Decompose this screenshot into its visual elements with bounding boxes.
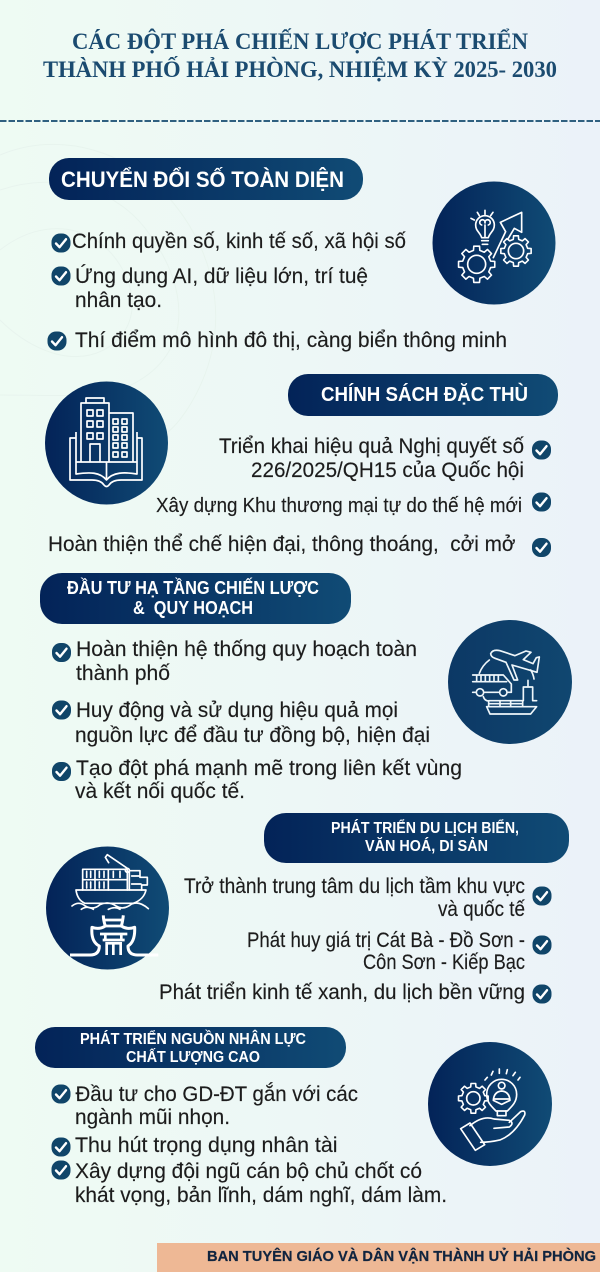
- heading pill: du lịch biển: [264, 813, 569, 863]
- bullet list: nguồn nhân lực: khát vọng, bản lĩnh, dám nghĩ, dám làm.: [75, 1183, 447, 1207]
- bullet list: nguồn nhân lực: Thu hút trọng dụng nhân tài: [75, 1133, 338, 1157]
- bullet list: du lịch biển: Trở thành trung tâm du lịch tầm khu vực: [184, 874, 525, 898]
- icon: hand holding gear and lightbulb: [428, 1042, 552, 1166]
- bullet list: đầu tư hạ tầng: [52, 637, 462, 803]
- icon: plane, bus and ship: [448, 620, 572, 744]
- heading pill: đầu tư hạ tầng: [40, 573, 351, 624]
- heading pill: chuyển đổi số: [49, 158, 363, 200]
- bullet list: nguồn nhân lực: ngành mũi nhọn.: [75, 1105, 230, 1129]
- title: [43, 28, 557, 83]
- bullet list: chính sách đặc thù: [48, 434, 551, 557]
- bullet list: chuyển đổi số: Thí điểm mô hình đô thị, càng biển thông minh: [75, 328, 507, 352]
- icon: buildings on open book: [45, 382, 168, 504]
- heading pill: nguồn nhân lực: PHÁT TRIỂN NGUỒN NHÂN LỰC: [80, 1030, 306, 1048]
- background contour lines: [0, 144, 216, 437]
- bullet list: chuyển đổi số: nhân tạo.: [75, 288, 162, 312]
- heading pill: chính sách đặc thù: [288, 374, 558, 416]
- heading pill: đầu tư hạ tầng: & QUY HOẠCH: [133, 598, 253, 618]
- bullet list: nguồn nhân lực: [52, 1081, 447, 1207]
- bullet list: nguồn nhân lực: Xây dựng đội ngũ cán bộ chủ chốt có: [75, 1159, 422, 1183]
- bullet list: đầu tư hạ tầng: nguồn lực để đầu tư đồng bộ, hiện đại: [75, 723, 430, 747]
- bullet list: du lịch biển: [159, 874, 552, 1004]
- bullet list: đầu tư hạ tầng: Tạo đột phá mạnh mẽ trong liên kết vùng: [76, 756, 462, 780]
- bullet list: đầu tư hạ tầng: Huy động và sử dụng hiệu quả mọi: [76, 698, 398, 722]
- bullet list: đầu tư hạ tầng: và kết nối quốc tế.: [75, 779, 245, 803]
- bullet list: chuyển đổi số: [48, 229, 507, 352]
- heading pill: du lịch biển: VĂN HOÁ, DI SẢN: [365, 838, 488, 855]
- bullet list: du lịch biển: Phát triển kinh tế xanh, du lịch bền vững: [159, 980, 525, 1004]
- heading pill: nguồn nhân lực: CHẤT LƯỢNG CAO: [126, 1049, 260, 1066]
- bullet list: chính sách đặc thù: 226/2025/QH15 của Quốc hội: [251, 458, 524, 482]
- title: CÁC ĐỘT PHÁ CHIẾN LƯỢC PHÁT TRIỂN: [72, 28, 528, 55]
- heading pill: chính sách đặc thù: CHÍNH SÁCH ĐẶC THÙ: [321, 382, 528, 406]
- bullet list: du lịch biển: và quốc tế: [438, 897, 525, 921]
- bullet list: đầu tư hạ tầng: thành phố: [76, 661, 170, 685]
- panel: chính sách đặc thù: [45, 374, 558, 557]
- heading pill: chuyển đổi số: CHUYỂN ĐỔI SỐ TOÀN DIỆN: [61, 166, 344, 192]
- bullet list: chính sách đặc thù: Hoàn thiện thể chế hiện đại, thông thoáng, cởi mở: [48, 532, 516, 556]
- bullet list: chuyển đổi số: Ứng dụng AI, dữ liệu lớn, trí tuệ: [75, 263, 368, 288]
- panel: chuyển đổi số toàn diện: [48, 158, 556, 352]
- heading pill: đầu tư hạ tầng: ĐẦU TƯ HẠ TẦNG CHIẾN LƯỢC: [67, 577, 319, 598]
- bullet list: đầu tư hạ tầng: Hoàn thiện hệ thống quy hoạch toàn: [76, 637, 417, 661]
- bullet list: nguồn nhân lực: Đầu tư cho GD-ĐT gắn với các: [76, 1081, 358, 1106]
- icon: container ship and temple gate: [46, 846, 169, 970]
- footer banner: [157, 1243, 600, 1272]
- panel: phát triển nguồn nhân lực: [35, 1027, 552, 1207]
- heading pill: du lịch biển: PHÁT TRIỂN DU LỊCH BIỂN,: [331, 819, 519, 837]
- title: THÀNH PHỐ HẢI PHÒNG, NHIỆM KỲ 2025- 2030: [43, 56, 557, 83]
- bullet list: chính sách đặc thù: Xây dựng Khu thương mại tự do thế hệ mới: [156, 495, 522, 517]
- heading pill: nguồn nhân lực: [35, 1027, 346, 1068]
- bullet list: du lịch biển: Côn Sơn - Kiếp Bạc: [363, 950, 525, 974]
- bullet list: chuyển đổi số: Chính quyền số, kinh tế số, xã hội số: [72, 229, 406, 253]
- bullet list: chính sách đặc thù: Triển khai hiệu quả Nghị quyết số: [219, 434, 524, 458]
- panel: đầu tư hạ tầng chiến lược: [40, 573, 572, 803]
- icon: lightbulb, gears and arrow: [432, 182, 556, 304]
- bullet list: du lịch biển: Phát huy giá trị Cát Bà - Đồ Sơn -: [247, 928, 525, 952]
- panel: phát triển du lịch biển: [46, 813, 569, 1004]
- footer banner: BAN TUYÊN GIÁO VÀ DÂN VẬN THÀNH UỶ HẢI PHÒNG: [207, 1247, 596, 1265]
